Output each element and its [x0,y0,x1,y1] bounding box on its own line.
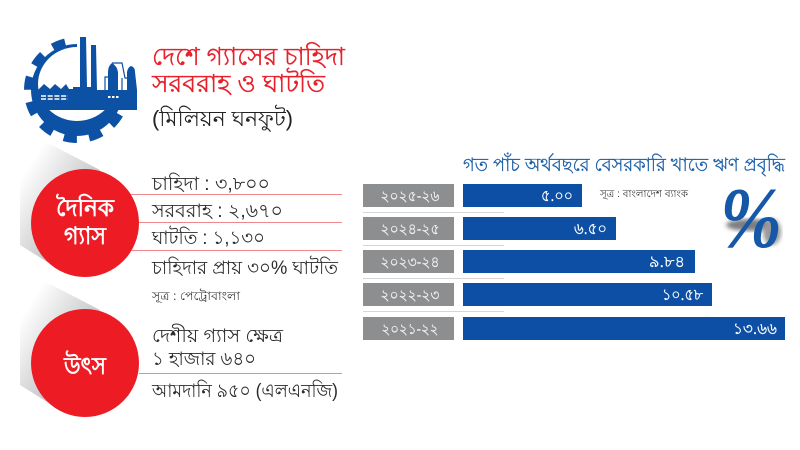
stat: supply: সরবরাহ : ২,৬৭০ [151,201,283,222]
bar row 2023-24 [363,250,695,273]
icon: percent sign: % [720,170,782,266]
bar row 2025-26: ৫.০০ [541,188,573,205]
bar row 2023-24: ৯.৮৪ [649,254,685,271]
bar row 2022-23 [363,283,712,306]
bar row 2025-26: ২০২৫-২৬ [380,188,440,205]
title: (মিলিয়ন ঘনফুট) [152,105,293,132]
source: petrobangla: সূত্র : পেট্রোবাংলা [151,289,241,304]
badge: daily gas [31,169,139,277]
chart title: গত পাঁচ অর্থবছরে বেসরকারি খাতে ঋণ প্রবৃদ্ধি [463,153,786,176]
bar row 2024-25: ২০২৪-২৫ [380,221,440,238]
shadow: source circle [20,280,100,410]
bar row 2021-22: ২০২১-২২ [382,321,438,338]
panel: source [31,309,342,417]
bar row 2024-25: ৬.৫০ [574,221,607,238]
shadow: daily gas circle [20,141,100,270]
title: সরবরাহ ও ঘাটতি [151,68,326,98]
bar chart: private credit growth [363,184,785,340]
stat: shortfall: ঘাটতি : ১,১৩০ [151,226,265,249]
bar row 2023-24: ২০২৩-২৪ [380,254,440,271]
stat: demand: চাহিদা : ৩,৮০০ [151,173,270,195]
title [151,42,346,132]
badge: source [31,309,139,417]
badge: source: উৎস [63,350,107,380]
icon: factory gear logo [29,37,137,138]
bar row 2022-23: ২০২২-২৩ [380,287,440,304]
bar row 2025-26 [363,184,582,207]
badge: daily gas: গ্যাস [64,223,107,250]
note: shortfall share: চাহিদার প্রায় ৩০% ঘাটতি [151,256,339,279]
panel: daily gas [31,169,342,304]
bar row 2021-22 [363,317,785,340]
stat: domestic quantity: ১ হাজার ৬৪০ [152,349,256,370]
title: দেশে গ্যাসের চাহিদা [152,42,346,71]
bar row 2021-22: ১৩.৬৬ [733,321,777,338]
bar row 2024-25 [363,217,616,240]
stat: imports: আমদানি ৯৫০ (এলএনজি) [151,380,338,402]
divider line [139,372,342,374]
stat: domestic gas fields: দেশীয় গ্যাস ক্ষেত্র [152,324,284,347]
divider lines [130,194,342,250]
badge: daily gas: দৈনিক [55,193,115,222]
bar row 2022-23: ১০.৫৮ [662,287,704,304]
source: bangladesh bank: সূত্র : বাংলাদেশ ব্যাংক [599,189,689,200]
